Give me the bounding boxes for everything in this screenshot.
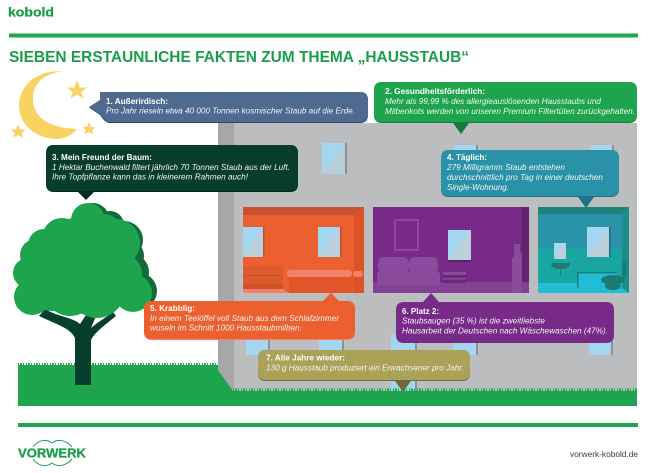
- callout 1: [89, 92, 368, 123]
- tree: [13, 203, 157, 385]
- canopy: [13, 203, 152, 318]
- callout 6: Hausarbeit der Deutschen nach Wäschewaschen (47%).: [402, 326, 608, 336]
- callout 6: 6. Platz 2:: [402, 307, 439, 316]
- room: living room (purple): [373, 207, 529, 293]
- callout 4: durchschnittlich pro Tag in einer deutschen: [447, 173, 604, 182]
- lawn: [18, 364, 637, 406]
- logo: Vorwerk: VORWERK: [18, 446, 87, 460]
- callout 5: In einem Teelöffel voll Staub aus dem Schlafzimmer: [150, 314, 339, 323]
- icon: moon and stars: [11, 71, 95, 139]
- room: bedroom (orange): [243, 207, 364, 293]
- title: SIEBEN ERSTAUNLICHE FAKTEN ZUM THEMA „HAUSSTAUB“: [9, 49, 469, 66]
- building: [218, 123, 637, 393]
- lower windows: [246, 335, 613, 392]
- website url: vorwerk-kobold.de: [570, 449, 638, 459]
- trunk and branches: [39, 309, 116, 385]
- callout 1: Pro Jahr rieseln etwa 40 000 Tonnen kosmischer Staub auf die Erde.: [106, 106, 355, 116]
- callout 5: [144, 293, 355, 340]
- callout 3: 3. Mein Freund der Baum:: [52, 153, 152, 162]
- callout 4: [441, 150, 619, 208]
- callout 7: 130 g Hausstaub produziert ein Erwachsener pro Jahr.: [266, 364, 464, 372]
- logo: Vorwerk: [18, 440, 87, 466]
- callout 5: wuseln im Schnitt 1000 Hausstaubmilben.: [150, 324, 302, 332]
- callout 3: 1 Hektar Buchenwald filtert jährlich 70 Tonnen Staub aus der Luft.: [52, 163, 290, 172]
- upper windows: [322, 143, 614, 174]
- callout 3: Ihre Topfpflanze kann das in kleinerem Rahmen auch!: [52, 172, 249, 182]
- callout 4: 4. Täglich:: [447, 153, 487, 162]
- callout 7: 7. Alle Jahre wieder:: [266, 354, 345, 362]
- callout 3: [46, 145, 298, 200]
- callout 2: [374, 82, 637, 134]
- callout 7: [258, 350, 470, 392]
- room: bathroom (teal): [538, 207, 629, 293]
- callout 6: Staubsaugen (35 %) ist die zweitliebste: [402, 316, 546, 326]
- callout 4: 279 Milligramm Staub entstehen: [446, 163, 566, 172]
- brand wordmark: kobold: kobold: [8, 4, 54, 20]
- canopy shadow: [39, 203, 157, 314]
- callout 2: Mehr als 99,99 % des allergieauslösenden Hausstaubs und: [385, 97, 602, 106]
- callout 2: Milbenkots werden von unseren Premium Filtertüten zurückgehalten.: [385, 107, 635, 116]
- callout 2: 2. Gesundheitsförderlich:: [385, 87, 485, 96]
- callout 1: 1. Außerirdisch:: [106, 97, 168, 106]
- callout 5: 5. Krabblig:: [150, 304, 195, 313]
- callout 4: Single-Wohnung.: [447, 183, 509, 192]
- callout 6: [396, 293, 614, 343]
